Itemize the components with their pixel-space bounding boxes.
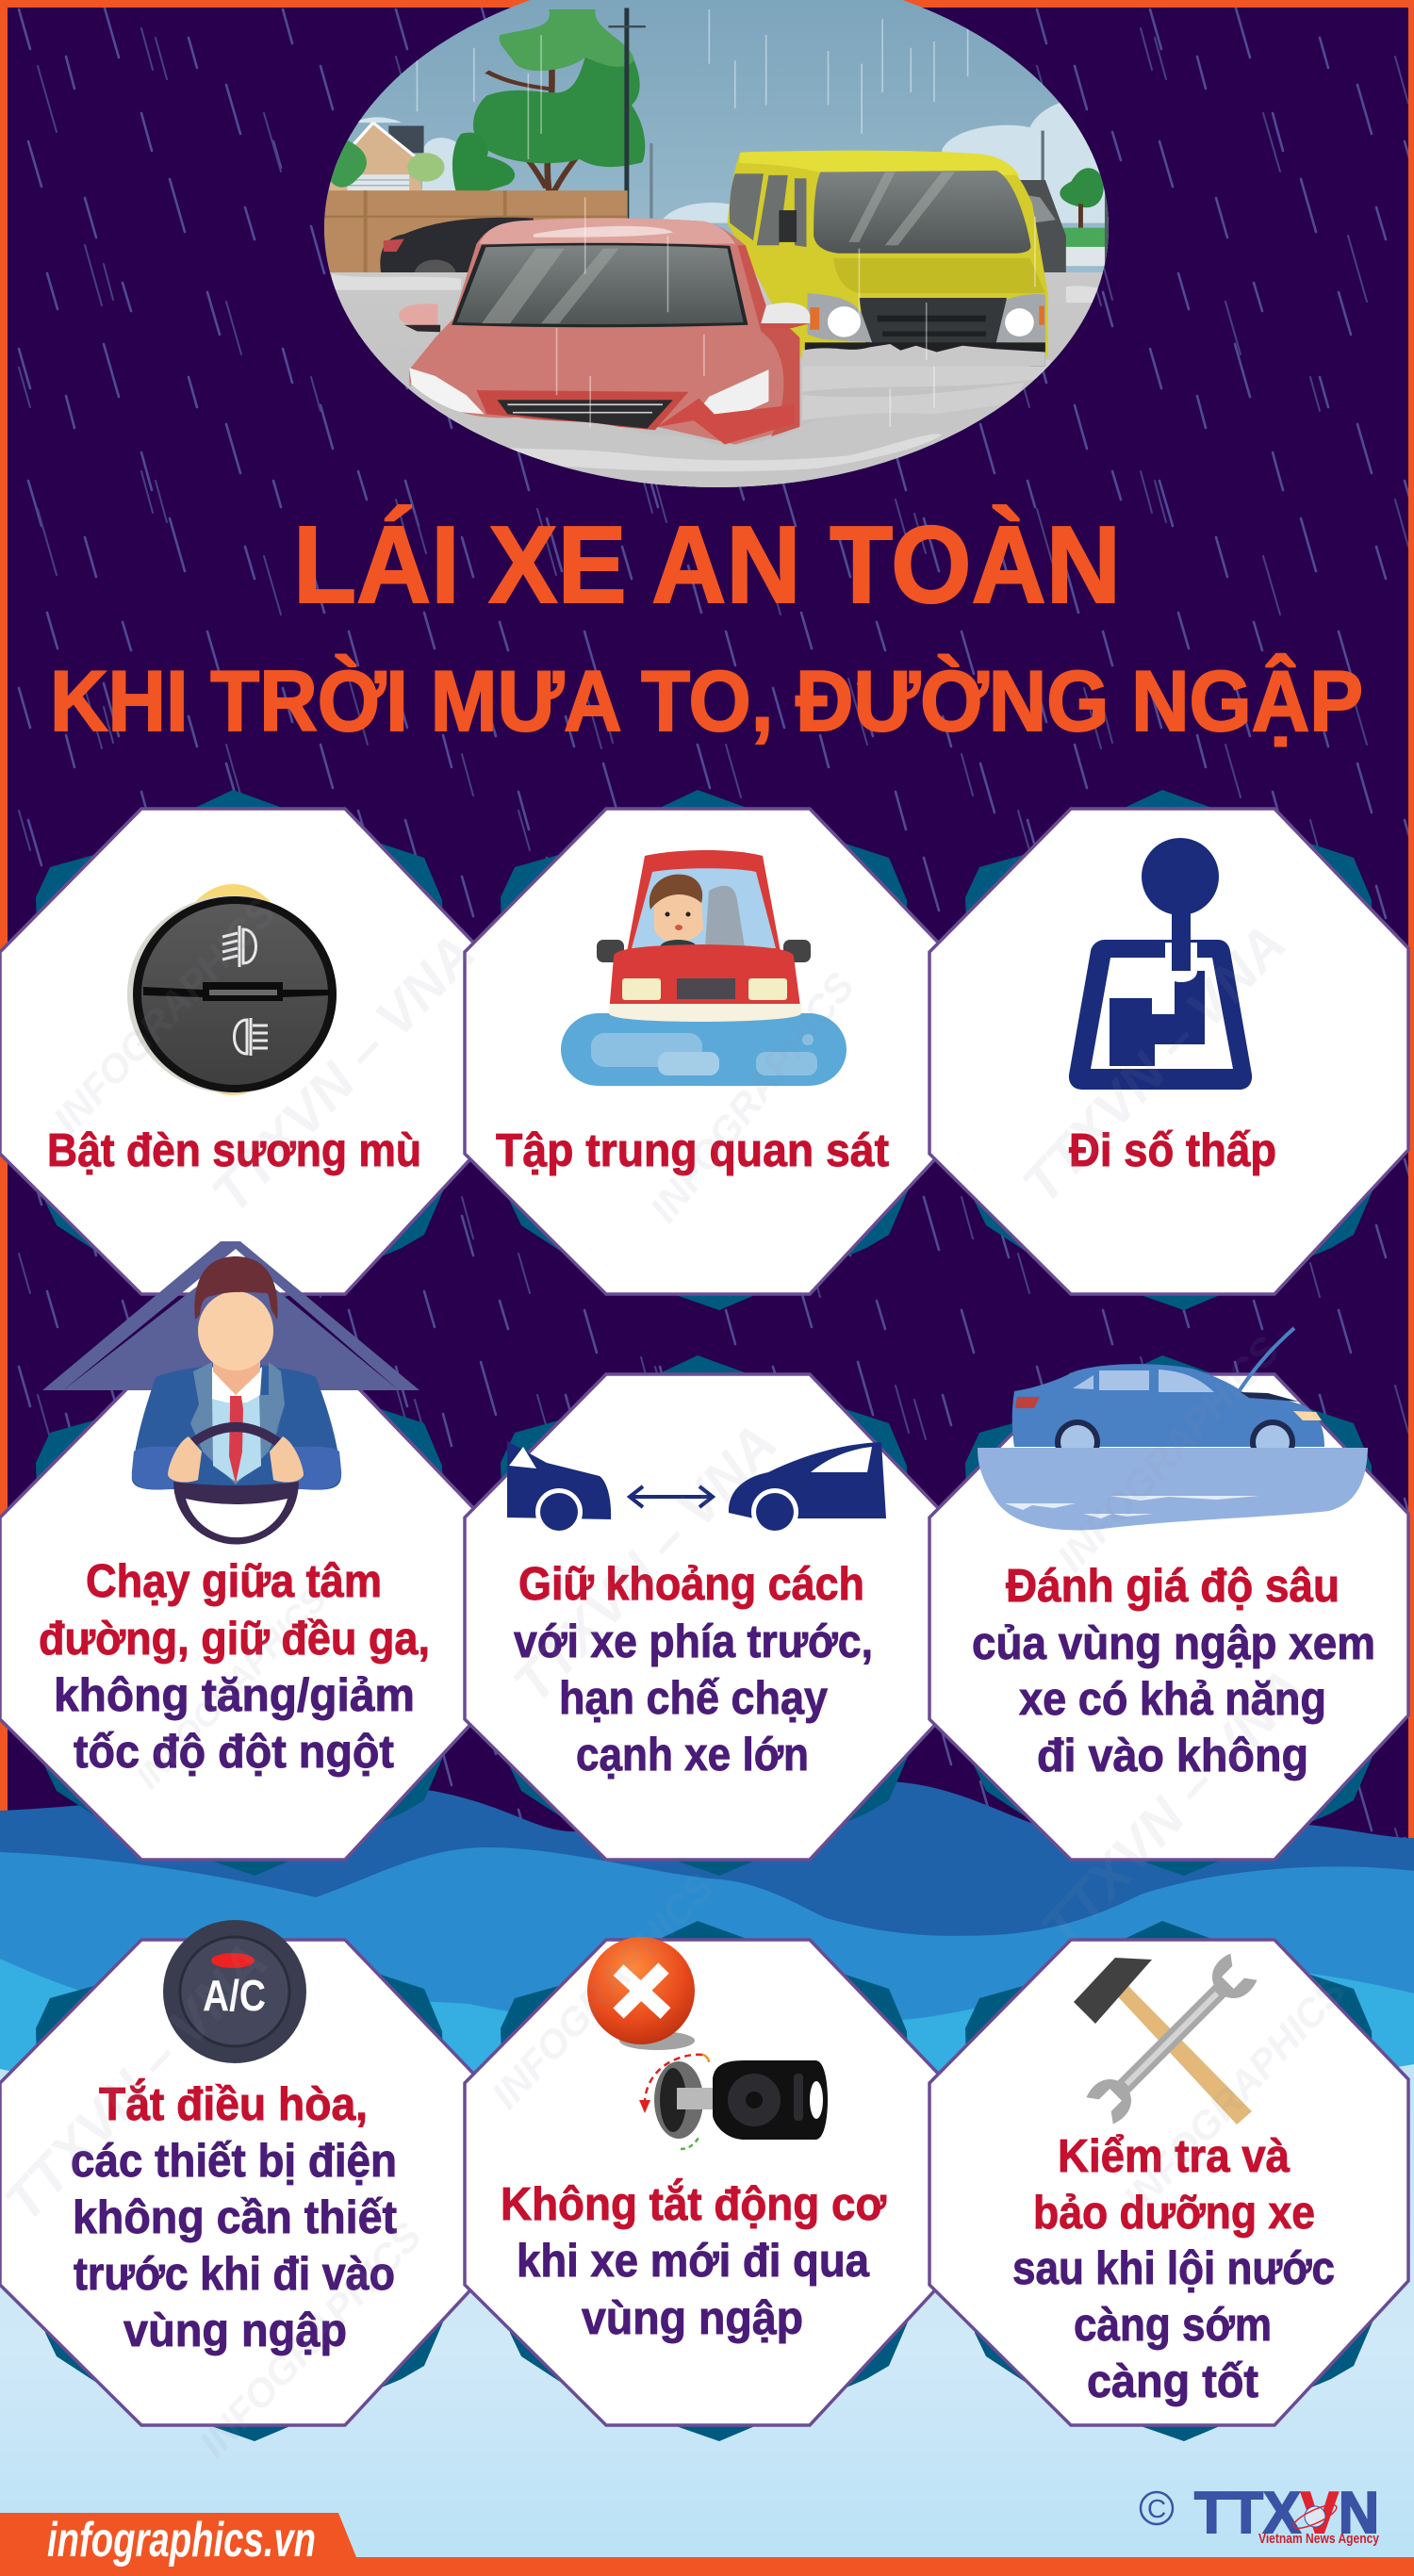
background: flood water waves xyxy=(0,1781,1414,2576)
label text: với xe phía trước, xyxy=(514,1616,873,1667)
label text: Đánh giá độ sâu xyxy=(1006,1561,1340,1612)
label text: cạnh xe lớn xyxy=(576,1730,809,1780)
label text: càng tốt xyxy=(1087,2356,1258,2407)
panel: đi số thấp xyxy=(929,790,1408,1310)
label text: Bật đèn sương mù xyxy=(47,1125,421,1176)
label text: hạn chế chạy xyxy=(559,1673,828,1724)
label text: tốc độ đột ngột xyxy=(74,1727,394,1778)
label text: sau khi lội nước xyxy=(1012,2243,1335,2294)
label text: của vùng ngập xem xyxy=(972,1618,1375,1669)
icon: car key in ignition xyxy=(639,2055,828,2149)
watermarks: TTXVN – VNA xyxy=(200,923,487,1224)
watermarks: TTXVN – VNA xyxy=(1011,913,1298,1215)
panel: tập trung quan sát xyxy=(465,790,944,1310)
label text: càng sớm xyxy=(1074,2300,1272,2351)
label text: Giữ khoảng cách xyxy=(518,1559,864,1610)
icon: A/C button xyxy=(163,1920,306,2063)
icon: A/C button: A/C xyxy=(203,1971,266,2020)
label text: Kiểm tra và xyxy=(1058,2131,1291,2182)
label text xyxy=(501,2178,886,2344)
icon: red cross ball xyxy=(587,1937,695,2050)
panel: bật đèn sương mù xyxy=(0,790,479,1310)
logo: TTXVN Vietnam News Agency: TTXVN xyxy=(1194,2481,1379,2546)
watermarks: INFOGRAPHICS xyxy=(44,890,284,1141)
label text: không cần thiết xyxy=(73,2192,397,2243)
icon: gear shifter xyxy=(1069,838,1252,1090)
logo: TTXVN Vietnam News Agency: Vietnam News Agency xyxy=(1258,2531,1380,2547)
panel: chạy giữa tâm đường xyxy=(0,1241,479,1876)
label text xyxy=(514,1559,873,1780)
watermarks: TTXVN – VNA xyxy=(501,1413,789,1715)
watermarks: INFOGRAPHICS xyxy=(641,964,863,1231)
orange frame: top, left and right xyxy=(0,0,1414,1847)
label text: Tập trung quan sát xyxy=(496,1125,889,1176)
title line 2: KHI TRỜI MƯA TO, ĐƯỜNG NGẬP xyxy=(50,653,1363,749)
icon: driver at steering wheel xyxy=(42,1241,419,1544)
label text: các thiết bị điện xyxy=(71,2136,397,2187)
illustration: cars driving through a flooded street xyxy=(324,0,1109,487)
label text xyxy=(1012,2131,1335,2407)
icon: hammer and wrench xyxy=(1074,1952,1258,2125)
label text: vùng ngập xyxy=(582,2293,803,2344)
watermarks: INFOGRAPHICS xyxy=(1114,1969,1354,2221)
panel: giữ khoảng cách xyxy=(465,1355,944,1876)
label text: Tắt điều hòa, xyxy=(99,2078,368,2130)
label text: Không tắt động cơ xyxy=(501,2178,886,2230)
icon: fog light button xyxy=(127,884,337,1095)
label text: Đi số thấp xyxy=(1069,1125,1276,1176)
watermarks: INFOGRAPHICS xyxy=(128,1580,334,1796)
watermarks: TTXVN – VNA xyxy=(0,1931,280,2233)
title line 1: LÁI XE AN TOÀN xyxy=(293,503,1121,626)
watermarks: INFOGRAPHICS xyxy=(190,2214,430,2466)
label text: vùng ngập xyxy=(123,2305,347,2356)
label text: xe có khả năng xyxy=(1019,1674,1326,1725)
label text xyxy=(71,2078,397,2356)
watermarks: TTXVN – VNA xyxy=(1029,1658,1317,1960)
panel: kiểm tra và bảo dưỡng xe xyxy=(929,1921,1408,2441)
label text: khi xe mới đi qua xyxy=(517,2236,870,2287)
icon: two cars with distance arrow xyxy=(507,1441,886,1535)
label text: đi vào không xyxy=(1037,1731,1308,1781)
watermarks: INFOGRAPHICS xyxy=(1048,1328,1288,1580)
label text: bảo dưỡng xe xyxy=(1033,2188,1315,2239)
label text xyxy=(972,1561,1375,1781)
label text: trước khi đi vào xyxy=(74,2249,395,2300)
label text: đường, giữ đều ga, xyxy=(39,1614,430,1665)
background: rain streaks xyxy=(0,8,1414,1846)
footer: website tag: infographics.vn xyxy=(47,2513,316,2568)
logo: TTXVN Vietnam News Agency: C xyxy=(1147,2494,1166,2523)
panel: tắt điều hòa xyxy=(0,1920,479,2441)
icon: blue car in flood water xyxy=(978,1328,1368,1530)
panel: đánh giá độ sâu xyxy=(929,1328,1408,1876)
footer: orange band xyxy=(0,2557,1414,2576)
label text: không tăng/giảm xyxy=(54,1670,415,1721)
panel: không tắt động cơ xyxy=(465,1921,944,2441)
icon: car in water with worried driver xyxy=(561,850,847,1086)
label text: Chạy giữa tâm xyxy=(86,1556,382,1607)
watermarks: INFOGRAPHICS xyxy=(483,1865,722,2117)
label text xyxy=(39,1556,430,1778)
watermarks xyxy=(0,890,1354,2466)
